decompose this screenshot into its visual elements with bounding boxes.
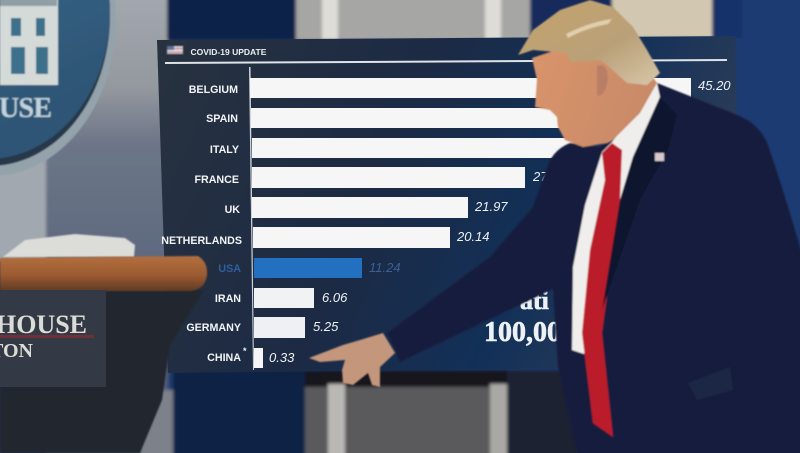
bar: China: CHINA [207, 352, 241, 364]
pin: flag [655, 153, 664, 161]
bar: Germany: 5.25 [313, 319, 339, 334]
panel: chart screen [157, 36, 741, 373]
podium [0, 234, 207, 453]
pocket [688, 367, 733, 400]
papers on podium [3, 234, 135, 257]
bar: Iran: 6.06 [322, 290, 348, 305]
bar: France: 27 [532, 169, 548, 184]
bar: China [207, 346, 295, 368]
callout: partly hidden text: 100,00 [484, 317, 561, 348]
bar: UK [225, 197, 508, 218]
header flag icon [167, 46, 183, 54]
hand pointing [309, 333, 395, 387]
bar: USA [218, 258, 401, 278]
ear [597, 65, 608, 96]
suit [387, 83, 800, 453]
podium body [0, 290, 204, 453]
callout: partly hidden text [484, 286, 561, 348]
bar: Belgium [189, 78, 731, 98]
bar: Spain: SPAIN [206, 113, 238, 125]
shirt [572, 83, 660, 354]
bar: China: 0.33 [269, 350, 295, 365]
bar: USA: 11.24 [369, 260, 401, 275]
bar: Belgium: 45.20 [698, 78, 731, 93]
figure: presenter in suit pointing at chart [309, 0, 800, 453]
hair [518, 0, 660, 85]
podium top [0, 256, 207, 291]
seal text: USE [0, 93, 52, 124]
header title: COVID-19 UPDATE [190, 47, 267, 57]
hair highlight [566, 19, 612, 38]
icon: building [0, 0, 58, 85]
bar: Germany [186, 317, 339, 338]
bar: China: * [243, 346, 247, 356]
bar: France: FRANCE [194, 174, 239, 186]
lapel shading [602, 97, 677, 310]
bar: Netherlands: 20.14 [456, 229, 490, 244]
callout: partly hidden text: ati [520, 286, 549, 315]
tie [582, 143, 622, 437]
bar: Italy [210, 138, 582, 158]
bar: Netherlands: NETHERLANDS [161, 235, 242, 247]
seal: White House emblem [0, 0, 116, 176]
neck and face [532, 42, 657, 147]
bar: Netherlands [161, 227, 490, 248]
bar: Germany: GERMANY [186, 322, 241, 334]
bar: UK: UK [225, 204, 240, 216]
bar: UK: 21.97 [474, 199, 508, 214]
bar: Spain [206, 108, 581, 128]
bar: USA: USA [218, 263, 241, 275]
bar: Iran: IRAN [215, 293, 241, 305]
bar: Belgium: BELGIUM [189, 84, 238, 96]
podium sign [0, 290, 106, 387]
bar: Italy: ITALY [210, 144, 239, 156]
bar: Iran [215, 288, 348, 308]
bar: France [194, 167, 548, 188]
bar chart [161, 78, 731, 368]
